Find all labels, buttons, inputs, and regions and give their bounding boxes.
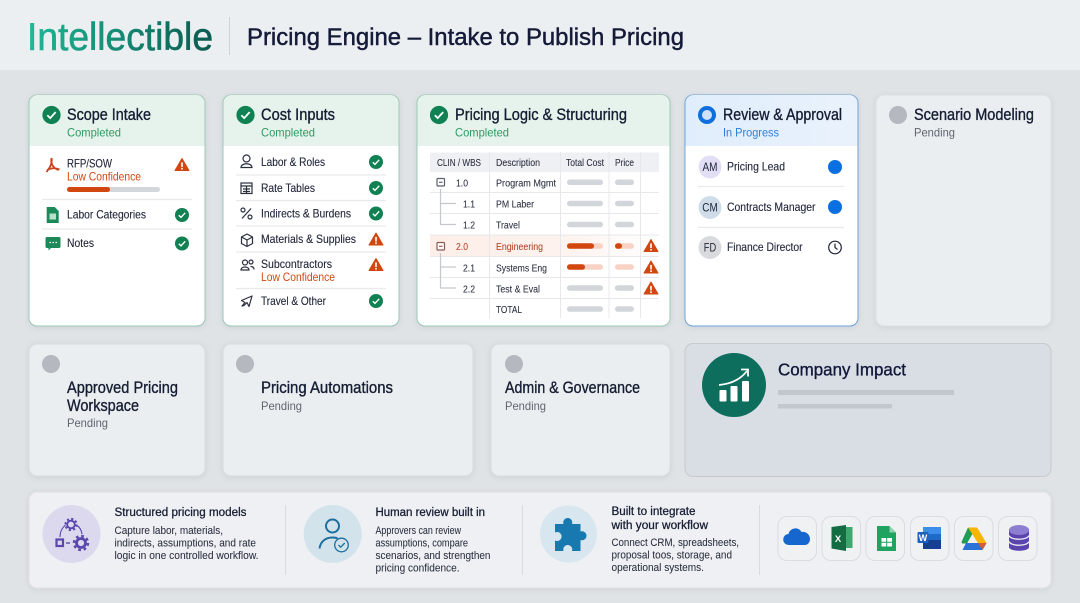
tree connectors (437, 178, 456, 288)
table rows: 2.1 (463, 264, 475, 274)
feature text (376, 525, 490, 574)
icon: notes (46, 237, 60, 250)
panel: Review & Approval (685, 95, 858, 326)
feature title: Built to integrate (612, 504, 696, 518)
icon: check (369, 206, 383, 220)
status text: Pending (261, 399, 302, 413)
heading: Review & Approval (723, 106, 842, 124)
status icon: in progress (698, 106, 716, 124)
feature text: operational systems. (612, 562, 704, 574)
logo wordmark: Intellectible (27, 16, 213, 59)
table rows: 1.2 (463, 220, 475, 232)
approver: Pricing Lead: Pricing Lead (727, 160, 785, 174)
icon: table (241, 183, 252, 194)
heading: Workspace (67, 397, 139, 415)
table rows: Systems Eng (496, 264, 547, 274)
icon: plane (242, 296, 252, 306)
heading (67, 379, 178, 415)
icon: word W (910, 516, 949, 560)
heading: Company Impact (778, 360, 906, 380)
heading: Admin & Governance (505, 379, 640, 397)
footer panel (29, 492, 1051, 588)
table rows: Program Mgmt (496, 178, 556, 190)
placeholder lines (778, 390, 954, 408)
feature text: proposal toos, storage, and (612, 550, 732, 562)
heading: Pricing Logic & Structuring (455, 106, 627, 124)
header band (0, 0, 1080, 70)
table rows: 1.1 (463, 200, 475, 210)
feature: Human review built in (304, 505, 490, 574)
feature text: Approvers can review (376, 525, 461, 537)
status icon: completed (42, 106, 61, 124)
icon: percent (241, 208, 252, 219)
status text: Pending (67, 416, 108, 430)
approver: Finance Director: FD (704, 242, 716, 254)
table header (437, 158, 634, 169)
approver: Pricing Lead (698, 156, 842, 178)
approver: Contracts Manager: CM (702, 202, 718, 214)
icon: check (369, 155, 383, 169)
feature: Structured pricing models (42, 505, 258, 563)
item: Labor & Roles: Labor & Roles (261, 155, 325, 169)
table rows: Travel (496, 220, 520, 232)
icon: people (241, 260, 254, 270)
item: RFP/SOW: RFP/SOW (67, 156, 113, 170)
warning icons (644, 240, 658, 294)
feature title: Structured pricing models (114, 505, 246, 519)
heading: Scope Intake (67, 106, 151, 124)
item: Subcontractors: Subcontractors (261, 257, 332, 271)
table rows: Engineering (496, 242, 543, 253)
approver: Pricing Lead: AM (702, 162, 718, 174)
feature text: logic in one controlled workflow. (114, 550, 258, 562)
status text: Completed (455, 126, 509, 140)
low confidence label: Low Confidence (67, 170, 141, 184)
status text: Completed (261, 126, 315, 140)
item: Materials & Supplies: Materials & Supplies (261, 232, 356, 246)
panel: Pricing Automations (223, 344, 473, 476)
icon: word W: W (919, 533, 928, 543)
integration icons (778, 516, 1037, 560)
feature text (612, 537, 739, 574)
icon: person (241, 155, 252, 168)
panel: Scope Intake (29, 95, 205, 326)
feature text: Connect CRM, spreadsheets, (612, 537, 739, 549)
confidence bar (67, 187, 160, 192)
feature title: with your workflow (611, 518, 708, 532)
status text: Pending (914, 126, 955, 140)
heading: Pricing Automations (261, 379, 393, 397)
page title: Pricing Engine – Intake to Publish Pricing (247, 24, 684, 51)
feature text: Capture labor, materials, (114, 525, 223, 537)
item: Notes: Notes (67, 236, 94, 250)
icon: warning (175, 158, 189, 170)
table rows: PM Laber (496, 200, 535, 210)
item: Labor Categories: Labor Categories (67, 208, 146, 222)
table header: Description (496, 158, 540, 169)
feature: Built to integrate (540, 504, 739, 574)
item: Rate Tables: Rate Tables (261, 181, 315, 195)
icon: check (369, 294, 383, 308)
feature text: scenarios, and strengthen (376, 550, 490, 562)
status icon: completed (236, 106, 255, 124)
table header: Total Cost (566, 158, 604, 169)
icon: cloud storage (778, 516, 816, 560)
icon: puzzle piece (540, 506, 597, 562)
icon: green sheet (866, 516, 904, 560)
heading: Cost Inputs (261, 106, 335, 124)
feature title (611, 504, 708, 532)
icon: check (175, 208, 189, 222)
low confidence label: Low Confidence (261, 270, 335, 284)
table: CLIN / WBS (430, 152, 659, 318)
icon: check (175, 236, 189, 250)
cost and price bars (567, 180, 634, 312)
panel: Scenario Modeling (876, 95, 1051, 326)
table header: CLIN / WBS (437, 158, 481, 169)
icon: box (242, 234, 252, 246)
approver: Contracts Manager (698, 196, 842, 219)
table rows: 2.0 (456, 242, 468, 253)
icon: check (369, 181, 383, 195)
heading: Scenario Modeling (914, 106, 1034, 124)
feature title: Human review built in (376, 505, 485, 519)
feature text: indirects, assumptions, and rate (114, 538, 256, 550)
table header: Price (615, 158, 634, 169)
icon: database (998, 516, 1037, 560)
icon: gears workflow (42, 505, 100, 563)
icon: pdf (46, 158, 60, 172)
panel: Pricing Logic & Structuring (417, 95, 670, 326)
table rows: TOTAL (496, 305, 522, 316)
status text: Pending (505, 399, 546, 413)
status icon: completed (430, 106, 448, 124)
item: Travel & Other: Travel & Other (261, 294, 326, 308)
panel: Cost Inputs (223, 95, 399, 326)
approver: Contracts Manager: Contracts Manager (727, 200, 816, 214)
panel: Approved Pricing Workspace (29, 344, 205, 476)
approver: Finance Director: Finance Director (727, 240, 803, 254)
status text: Completed (67, 126, 121, 140)
panel: Admin & Governance (491, 344, 670, 476)
approver: Finance Director (698, 236, 841, 259)
icon: spreadsheet X (822, 516, 860, 560)
item: Indirects & Burdens: Indirects & Burdens (261, 206, 351, 220)
status text: In Progress (723, 126, 779, 140)
panel: Company Impact (685, 344, 1051, 476)
table rows (456, 178, 556, 316)
icon: warning (369, 258, 383, 270)
feature text (114, 525, 258, 562)
icon: sheet (47, 207, 59, 223)
icon: drive triangle (954, 516, 993, 560)
feature text: pricing confidence. (376, 562, 460, 574)
feature text: assumptions, compare (376, 538, 468, 550)
icon: warning (369, 233, 383, 245)
heading: Approved Pricing (67, 379, 178, 397)
table rows: 2.2 (463, 284, 475, 296)
icon: growth chart (702, 353, 766, 417)
table rows: Test & Eval (496, 284, 540, 296)
icon: spreadsheet X: X (835, 534, 842, 545)
table rows: 1.0 (456, 178, 468, 190)
icon: person check (304, 505, 362, 563)
